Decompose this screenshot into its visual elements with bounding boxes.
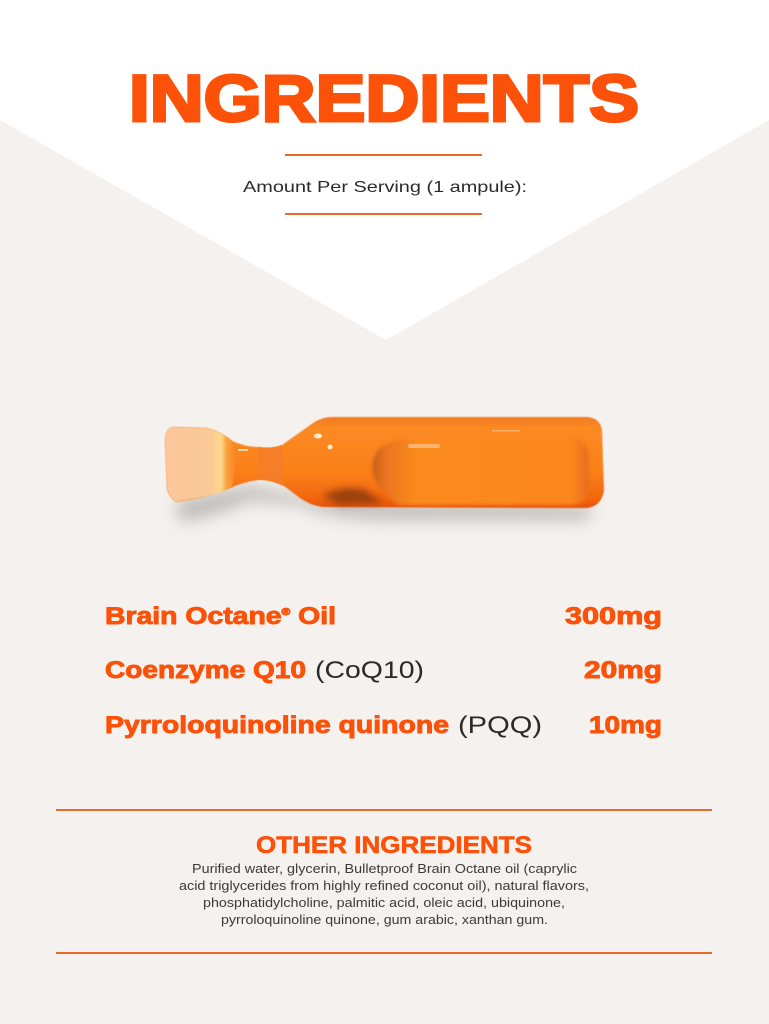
ingredient row: Coenzyme Q10: Coenzyme Q10 <box>105 657 306 684</box>
other ingredients text: pyrroloquinoline quinone, gum arabic, xanthan gum. <box>221 913 548 927</box>
ingredient row: Brain Octane: Brain Octane <box>105 603 254 630</box>
ingredient row: Pyrroloquinoline quinone <box>105 712 662 739</box>
ampule body <box>165 417 604 508</box>
ingredient row: Pyrroloquinoline quinone: Pyrroloquinoline quinone <box>105 712 449 739</box>
ampule shadow <box>178 485 590 522</box>
ampule neck <box>258 445 284 486</box>
other ingredients text: Purified water, glycerin, Bulletproof Brain Octane oil (caprylic <box>192 862 577 876</box>
ingredient row: Pyrroloquinoline quinone: (PQQ) <box>458 712 542 739</box>
ingredient row: Brain Octane <box>105 603 662 630</box>
ingredient row: Pyrroloquinoline quinone: 10mg <box>589 712 662 739</box>
ingredient row: Coenzyme Q10 <box>105 657 662 684</box>
title: INGREDIENTS <box>129 61 639 135</box>
ingredient row: Brain Octane: ® <box>282 607 291 618</box>
other ingredients text <box>179 862 589 927</box>
white chevron header <box>0 0 769 340</box>
other ingredients heading: OTHER INGREDIENTS <box>256 832 532 859</box>
ampule dark lower shading <box>322 488 385 505</box>
ingredient row: Coenzyme Q10: (CoQ10) <box>315 657 424 684</box>
other ingredients text: acid triglycerides from highly refined coconut oil), natural flavors, <box>179 879 589 893</box>
ampule highlights <box>238 430 520 451</box>
ampule illustration <box>165 417 604 522</box>
ingredient row: Brain Octane: 300mg <box>565 603 662 630</box>
subtitle with rules: Amount Per Serving (1 ampule): <box>243 179 527 196</box>
other ingredients text: phosphatidylcholine, palmitic acid, oleic acid, ubiquinone, <box>203 896 565 910</box>
ingredient row: Brain Octane: Oil <box>290 603 336 630</box>
other ingredients panel <box>56 809 712 954</box>
ingredient row: Coenzyme Q10: 20mg <box>584 657 662 684</box>
ampule tab <box>165 427 235 502</box>
ampule dent <box>372 438 589 505</box>
